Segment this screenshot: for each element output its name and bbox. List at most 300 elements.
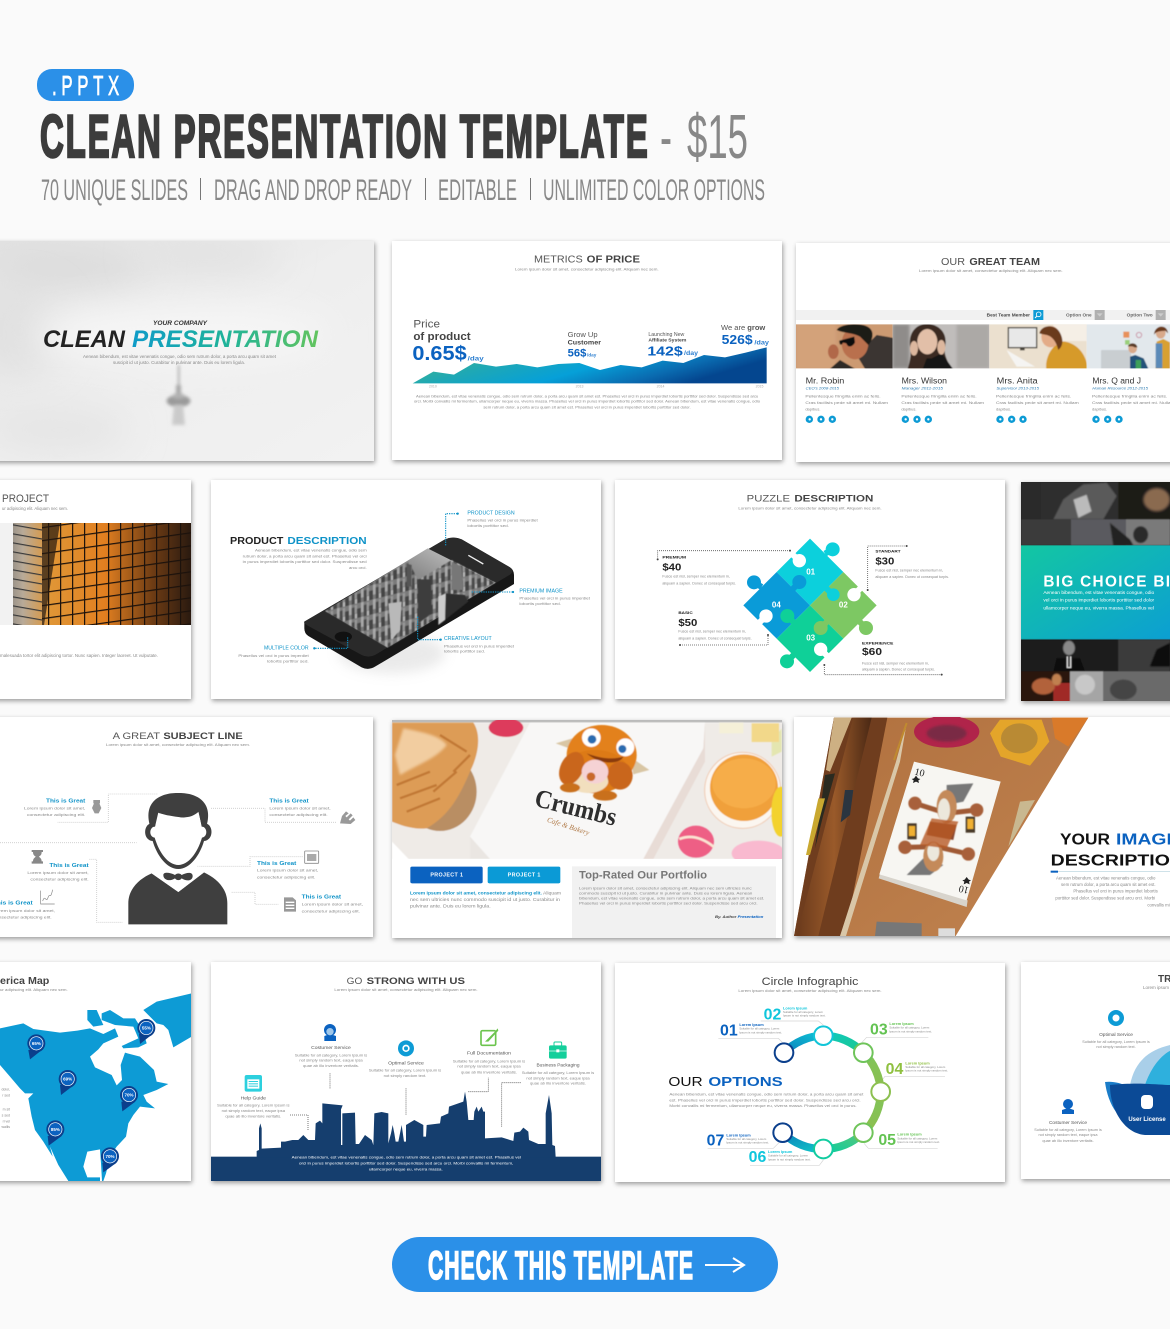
slide title: erica Map bbox=[0, 976, 49, 987]
slide: your image description bbox=[794, 716, 1170, 936]
option 06 bbox=[749, 1149, 811, 1166]
leader lines bbox=[708, 1021, 945, 1165]
axis years: 2014 bbox=[657, 385, 665, 389]
callout: lower left bbox=[0, 901, 55, 919]
team member: Mr. Robin bbox=[805, 376, 889, 423]
metric: 526$ bbox=[721, 325, 770, 347]
option 02 bbox=[764, 1006, 826, 1023]
callout: top right: This is Great bbox=[269, 798, 309, 804]
metric: 0.65$: of product bbox=[413, 331, 471, 343]
item: optimal service: Optimal Service bbox=[388, 1061, 424, 1066]
option 06: 06 bbox=[749, 1149, 766, 1166]
item: optimal service: Optimal Service bbox=[1099, 1032, 1133, 1038]
paragraph: wallis bbox=[1, 1125, 10, 1129]
option 02: Suitable for all category, Lorem bbox=[783, 1010, 824, 1014]
photo collage: bottom bbox=[1018, 640, 1170, 704]
team member: Mrs. Wilson bbox=[901, 376, 985, 423]
subtitle features: EDITABLE bbox=[438, 174, 517, 207]
slide title: METRICS bbox=[534, 255, 583, 266]
text: your company: YOUR COMPANY bbox=[153, 321, 208, 327]
item: business packaging: Business Packaging bbox=[536, 1062, 580, 1067]
button: project 1 blue: PROJECT 1 bbox=[430, 872, 463, 878]
team member: Mr. Robin: CEO's 2008-2015 bbox=[806, 386, 840, 390]
panel: top-rated portfolio: bibendum, est vitae venenatis congue, odio sem rutrum dolor, a porta arcu quam sit amet est. bbox=[579, 897, 764, 901]
callout: premium image: Phasellus vel orci in purus imperdiet bbox=[519, 596, 591, 601]
callout: middle right bbox=[257, 861, 318, 879]
option 06: Suitable for all category, Lorem bbox=[768, 1154, 809, 1158]
team member: Mrs. Q and J: Pellentesque fringilla enim ac felis. bbox=[1092, 394, 1167, 399]
slide title: OUR bbox=[941, 257, 965, 268]
metric: 0.65$: Price bbox=[413, 319, 440, 331]
photo: macarons and plate bbox=[678, 723, 790, 866]
icon: hourglass bbox=[32, 850, 43, 864]
slide title: Circle Infographic bbox=[762, 976, 859, 988]
option 01: 01 bbox=[720, 1023, 738, 1040]
item: help guide: not simply random text, eaque ipsa bbox=[222, 1109, 286, 1113]
panel: top-rated portfolio: commodo suscipit id ut justo. Curabitur in pulvinar ante. Duis eu lorem ligula. Aenean bbox=[579, 892, 752, 896]
paragraph: ullamcorper neque eu, viverra massa. Phasellus vel bbox=[1043, 605, 1154, 611]
slide title: PUZZLE bbox=[747, 494, 790, 504]
item: business packaging: not simply random text, eaque ipsa bbox=[526, 1076, 591, 1080]
option 07: Lorem Ipsum bbox=[726, 1133, 751, 1137]
slide: product description bbox=[211, 480, 601, 699]
subtitle features: DRAG AND DROP READY bbox=[214, 174, 412, 207]
slide: puzzle description bbox=[615, 480, 1005, 699]
heading: BIG CHOICE BI bbox=[1043, 573, 1170, 590]
callout: top left: consectetur adipiscing elit. bbox=[27, 812, 85, 817]
puzzle graphic: 03 bbox=[806, 634, 816, 643]
callout: creative layout: lobortis porttitor sed. bbox=[444, 649, 485, 654]
paragraph: orci in purus imperdiet lobortis porttitor sed dolor. Suspendisse sed arcu orci. Morbi convallis mi fermentum, bbox=[299, 1161, 513, 1166]
slide title: SUBJECT LINE bbox=[163, 731, 243, 741]
team member: Mr. Robin: Cras facilisis pede sit amet mi. Nullam bbox=[805, 400, 889, 405]
slide title: OF PRICE bbox=[587, 255, 640, 266]
heading: clean presentation bbox=[43, 326, 319, 353]
option 04: Ipsum is not simply random text. bbox=[905, 1069, 948, 1073]
paragraph: Aenean bibendum, est vitae venenatis congue, odio sem rutrum dolor, a porta arcu quam sit amet bbox=[669, 1091, 864, 1096]
option 03: Ipsum is not simply random text. bbox=[889, 1029, 932, 1033]
map pins bbox=[27, 1019, 155, 1172]
map pins: 70% bbox=[124, 1093, 134, 1098]
callout: middle right: Lorem ipsum dolor sit amet, bbox=[257, 868, 318, 873]
price: basic: $50 bbox=[678, 618, 698, 629]
option 04: 04 bbox=[886, 1061, 904, 1078]
team member: Mrs. Wilson: dapibus. bbox=[901, 406, 916, 411]
heading: clean presentation: CLEAN bbox=[43, 326, 126, 353]
option 03: Suitable for all category, Lorem bbox=[889, 1026, 930, 1030]
item: full documentation: Suitable for all category, Lorem Ipsum is bbox=[453, 1059, 525, 1063]
item: costumer service: Costumer Service bbox=[1049, 1120, 1087, 1126]
subtitle features: UNLIMITED COLOR OPTIONS bbox=[543, 174, 765, 207]
icon: pencil bbox=[340, 811, 355, 824]
option 06: Ipsum is not simply random text. bbox=[768, 1157, 811, 1161]
callout: middle left: This is Great bbox=[49, 863, 89, 869]
slide title: PROJECT bbox=[2, 493, 49, 505]
option 07: Suitable for all category, Lorem bbox=[726, 1137, 767, 1141]
slide title bbox=[347, 976, 465, 986]
item: costumer service bbox=[295, 1024, 367, 1068]
option 01: Lorem Ipsum bbox=[739, 1023, 764, 1027]
callout: top left: This is Great bbox=[46, 798, 85, 804]
subtitle: Lorem ipsum dolor sit amet, consectetur adipiscing elit. Aliquam nec sem. bbox=[738, 988, 882, 993]
lotus graphic bbox=[1105, 1045, 1170, 1135]
callout: top left: Lorem ipsum dolor sit amet, bbox=[24, 806, 85, 811]
callout: product design: Phasellus vel orci in purus imperdiet bbox=[467, 518, 539, 523]
callout: top right: Lorem ipsum dolor sit amet, bbox=[269, 805, 331, 810]
heading: clean presentation: PRESENTATION bbox=[132, 326, 319, 353]
badge: .PPTX bbox=[37, 69, 134, 101]
connector lines bbox=[290, 1073, 521, 1130]
slide: circle infographic bbox=[615, 963, 1005, 1182]
card illustration: dwarf king bbox=[898, 783, 983, 875]
badge: .PPTX: .PPTX bbox=[52, 70, 119, 101]
price: experience: Fusce est nisl, semper nec elementum in, bbox=[862, 661, 929, 665]
paragraph: ri vel bbox=[3, 1119, 10, 1123]
heading bbox=[230, 536, 367, 547]
icon: document bbox=[284, 897, 296, 912]
slide: a great subject line bbox=[0, 717, 373, 937]
metric: 56$: /day bbox=[587, 353, 597, 358]
paragraph: Aenean bibendum, est vitae venenatis congue, odio bbox=[1056, 875, 1156, 880]
team member: Mr. Robin: Pellentesque fringilla enim ac felis. bbox=[805, 394, 881, 399]
filter bar: Best Team Member bbox=[987, 313, 1030, 318]
paragraph: orci. Morbi convallis mi fermentum, ullamcorper neque eu, viverra massa. Phasellus vel orci in purus imperdiet lobortis porttitor sed dolor. Aenean bibendum, est vitae venenatis congue, odio bbox=[414, 400, 760, 404]
paragraph: porttitor sed dolor. Suspendisse sed arcu orci. Morbi bbox=[1055, 896, 1155, 901]
puzzle graphic: 02 bbox=[839, 601, 848, 610]
subtitle: ur adipiscing elit. Aliquam nec sem. bbox=[0, 988, 68, 992]
item: optimal service bbox=[1082, 1010, 1150, 1049]
callout: creative layout: CREATIVE LAYOUT bbox=[444, 636, 493, 642]
team member: Mr. Robin: Mr. Robin bbox=[806, 376, 844, 385]
paragraph: sem rutrum dolor, a porta arcu quam sit amet est. bbox=[1061, 882, 1156, 887]
subtitle features bbox=[41, 174, 765, 207]
paragraph: m sit bbox=[3, 1108, 10, 1112]
paragraph bbox=[243, 547, 367, 570]
option 03: 03 bbox=[870, 1022, 888, 1039]
paragraph: r sed bbox=[2, 1094, 10, 1098]
map pins: 85% bbox=[51, 1127, 60, 1132]
header bbox=[37, 69, 765, 207]
callout: top left bbox=[24, 798, 85, 817]
paragraph: Aenean bibendum, est vitae venenatis congue, odio sem bbox=[255, 547, 367, 552]
callout: premium image: PREMIUM IMAGE bbox=[519, 588, 563, 594]
subtitle: Lorem ipsum dolor sit amet, consectetur adipiscing elit. Aliquam nec sem. bbox=[106, 743, 250, 747]
callout: creative layout bbox=[418, 617, 515, 654]
photo: woman thinking bbox=[892, 324, 990, 368]
price: basic: aliquam a sapien. Donec ut consequat turpis. bbox=[678, 636, 752, 640]
option 01 bbox=[720, 1023, 782, 1040]
option 05: 05 bbox=[878, 1132, 896, 1149]
item: costumer service: not simply random text, eaque ipsa bbox=[299, 1059, 364, 1063]
icon: tower bbox=[166, 365, 190, 425]
price: basic: Fusce est nisl, semper nec elementum in, bbox=[678, 630, 746, 634]
item: optimal service: not simply random text. bbox=[1096, 1045, 1136, 1049]
puzzle graphic: 01 bbox=[806, 567, 816, 576]
subtitle: ur adipiscing elit. Aliquam nec sem. bbox=[2, 506, 68, 511]
filter bar: Option Two bbox=[1127, 313, 1153, 318]
team member: Mrs. Q and J: Mrs. Q and J bbox=[1092, 376, 1141, 385]
team member: Mrs. Q and J: dapibus. bbox=[1092, 406, 1107, 411]
option 06: Lorem Ipsum bbox=[768, 1150, 792, 1154]
item: costumer service bbox=[1034, 1099, 1102, 1143]
callout: top right bbox=[269, 798, 331, 817]
heading: PRODUCT bbox=[230, 536, 283, 547]
price: standart: STANDART bbox=[875, 550, 902, 554]
paragraph: est. Phasellus vel orci in purus imperdiet lobortis porttitor sed dolor. Suspendisse sed arcu orci. bbox=[669, 1097, 861, 1102]
paragraph: convallis mi bbox=[1147, 902, 1170, 907]
heading: IMAGE bbox=[1116, 831, 1170, 848]
panel: top-rated portfolio: By. Author Presentation bbox=[715, 915, 764, 919]
option 05: Suitable for all category, Lorem bbox=[897, 1136, 938, 1140]
item: costumer service: quae ab illo inventore veritatis. bbox=[303, 1064, 359, 1068]
item: full documentation: quae ab illo inventore veritatis. bbox=[461, 1070, 517, 1074]
subtitle: Lorem ipsum dolor sit amet, consectetur adipiscing elit. Aliquam nec sem. bbox=[334, 987, 478, 992]
item: optimal service bbox=[369, 1040, 441, 1078]
option 07: Ipsum is not simply random text. bbox=[726, 1141, 769, 1145]
item: business packaging: quae ab illo inventore veritatis. bbox=[530, 1082, 586, 1086]
option 01: Ipsum is not simply random text. bbox=[739, 1030, 782, 1034]
photo: playing card on cork desk bbox=[794, 716, 1088, 936]
item: full documentation bbox=[453, 1028, 525, 1074]
paragraph: Aenean bibendum, est vitae venenatis congue, odio bbox=[1043, 590, 1155, 596]
price: - bbox=[660, 103, 672, 172]
option 04: Lorem Ipsum bbox=[905, 1061, 930, 1065]
slide title: GO bbox=[347, 976, 362, 986]
callout: product design bbox=[446, 510, 539, 545]
item: costumer service: quae ab illo inventore veritatis. bbox=[1042, 1139, 1094, 1143]
paragraph: nec sem ultricies nunc commodo suscipit id ut justo. Curabitur in bbox=[410, 897, 561, 902]
price: $15 bbox=[687, 103, 748, 172]
slide: project bbox=[0, 480, 191, 699]
metric: 526$: We are grow bbox=[721, 325, 766, 332]
price: standart: Fusce est nisl, semper nec elementum in, bbox=[875, 569, 943, 573]
price: premium: aliquam a sapien. Donec ut consequat turpis. bbox=[662, 581, 736, 585]
paragraph: Aenean bibendum, est vitae venenatis congue, odio sem rutrum dolor, a porta arcu quam sit amet est. Phasellus vel orci in purus imperdiet lobortis porttitor sed dolor. Suspendisse sed arcu bbox=[416, 394, 758, 398]
callout: lower right: consectetur adipiscing elit. bbox=[302, 908, 360, 913]
slide title: DESCRIPTION bbox=[794, 494, 874, 504]
callout: multiple color: lobortis porttitor sed. bbox=[267, 658, 309, 663]
photo: office team bbox=[1086, 324, 1170, 368]
callout: lower right: This is Great bbox=[302, 895, 341, 901]
metric: 142$ bbox=[647, 332, 699, 358]
option 03 bbox=[870, 1022, 932, 1039]
item: help guide bbox=[217, 1075, 290, 1118]
logo text: Crumbs: Crumbs bbox=[532, 783, 620, 832]
callout: multiple color: Phasellus vel orci in purus imperdiet bbox=[238, 653, 310, 658]
team member: Mrs. Wilson: Manager 2011-2015 bbox=[902, 386, 944, 390]
item: optimal service: not simply random text. bbox=[384, 1074, 426, 1078]
map pins: 69% bbox=[63, 1077, 72, 1082]
subtitle: Lorem ipsum dolor sit amet, consectetur adipiscing elit. Aliquam nec sem. bbox=[919, 268, 1063, 273]
connector lines bbox=[657, 545, 943, 676]
item: business packaging bbox=[522, 1042, 594, 1086]
photo: orange building bbox=[0, 523, 191, 625]
button: project 1 cyan: PROJECT 1 bbox=[508, 872, 540, 878]
team member: Mrs. Anita: Mrs. Anita bbox=[997, 376, 1038, 385]
paragraph: Morbi convallis mi fermentum, ullamcorper neque eu, viverra massa. Phasellus vel orci in purus. bbox=[669, 1103, 857, 1108]
photo: bakery box bbox=[389, 718, 785, 859]
paragraph: ullamcorper neque eu, viverra massa. bbox=[369, 1167, 443, 1172]
price: basic bbox=[678, 611, 752, 640]
filter bar: Option One bbox=[1066, 313, 1092, 318]
metric: 142$: 142$ bbox=[647, 343, 683, 358]
callout: middle left: Lorem ipsum dolor sit amet, bbox=[27, 870, 89, 875]
callout: multiple color bbox=[238, 637, 348, 663]
axis years: 2015 bbox=[756, 385, 764, 389]
item: costumer service: Costumer Service bbox=[311, 1045, 351, 1050]
slide: metrics of price bbox=[392, 241, 782, 460]
text: user license bbox=[1128, 1095, 1166, 1123]
metric: 142$: /day bbox=[684, 351, 699, 357]
callout: product design: PRODUCT DESIGN bbox=[467, 510, 515, 516]
callout: lower right bbox=[302, 895, 363, 913]
item: optimal service: Suitable for all category, Lorem Ipsum is bbox=[369, 1069, 441, 1073]
option 04 bbox=[886, 1061, 948, 1078]
photo: woman at laptop bbox=[989, 324, 1087, 368]
icon: calendar bbox=[305, 851, 319, 863]
puzzle graphic bbox=[743, 539, 877, 672]
card deck: 10 bbox=[958, 882, 970, 895]
price: standart bbox=[875, 550, 949, 579]
button: check this template bbox=[392, 1237, 778, 1292]
card deck bbox=[879, 762, 1001, 907]
paragraph: arcu orci. bbox=[349, 565, 367, 570]
metric: 526$: /day bbox=[754, 340, 770, 346]
option 05: Ipsum is not simply random text. bbox=[897, 1140, 940, 1144]
item: help guide: Help Guide bbox=[241, 1095, 266, 1100]
metric: 142$: Launching New bbox=[648, 332, 685, 338]
photo footer white bbox=[392, 859, 782, 938]
paragraph bbox=[1, 1088, 10, 1129]
paragraph bbox=[414, 394, 760, 409]
option 05: Lorem Ipsum bbox=[897, 1133, 922, 1137]
team member: Mrs. Anita: dapibus. bbox=[996, 406, 1011, 411]
option 05 bbox=[878, 1132, 940, 1149]
price: experience: aliquam a sapien. Donec ut consequat turpis. bbox=[862, 667, 935, 671]
paragraph: rutrum dolor, a porta arcu quam sit amet est. Phasellus vel orci bbox=[243, 553, 367, 558]
slide: user license bbox=[1021, 962, 1170, 1179]
item: full documentation: not simply random text, eaque ipsa bbox=[457, 1065, 522, 1069]
price: premium: PREMIUM bbox=[662, 556, 686, 560]
map pins: 70% bbox=[105, 1154, 115, 1159]
option 01: Suitable for all category, Lorem bbox=[739, 1027, 780, 1031]
team member: Mrs. Wilson: Cras facilisis pede sit amet mi. Nullam bbox=[901, 400, 985, 405]
logo text: Crumbs: Cafe & Bakery bbox=[546, 815, 591, 837]
teal band bbox=[1021, 545, 1170, 640]
heading: our options: OUR bbox=[668, 1074, 703, 1089]
icon: pen nib bbox=[92, 800, 101, 813]
item: costumer service: not simply random text, eaque ipsa bbox=[1039, 1133, 1098, 1137]
map pins: 55% bbox=[142, 1026, 151, 1031]
paragraph: dolor, bbox=[1, 1088, 10, 1092]
item: help guide: Suitable for all category, Lorem Ipsum is bbox=[217, 1104, 290, 1108]
item: costumer service: Suitable for all category, Lorem Ipsum is bbox=[295, 1053, 367, 1057]
paragraph bbox=[410, 891, 561, 908]
heading: DESCRIPTION bbox=[287, 536, 367, 547]
team member: Mrs. Wilson: Mrs. Wilson bbox=[902, 376, 947, 385]
subtitle: Lorem ipsum dolor sit amet, consectetur adipiscing elit. Aliquam nec sem. bbox=[515, 266, 659, 271]
paragraph: Aenean bibendum, est vitae venenatis congue, odio sem rutrum dolor, a porta arcu quam sit amet est. Phasellus vel bbox=[292, 1155, 521, 1160]
option 02: 02 bbox=[764, 1006, 781, 1023]
title: CLEAN PRESENTATION TEMPLATE bbox=[40, 104, 648, 171]
option 02: Lorem Ipsum bbox=[783, 1006, 807, 1010]
team member: Mrs. Anita: Cras facilisis pede sit amet mi. Nullam bbox=[996, 400, 1079, 405]
callout: middle right: This is Great bbox=[257, 861, 296, 867]
subtitle features: 70 UNIQUE SLIDES bbox=[41, 174, 188, 207]
axis years: 2013 bbox=[576, 385, 584, 389]
price bbox=[660, 103, 748, 172]
callout: premium image: lobortis porttitor sed. bbox=[519, 601, 561, 606]
illustration: monster mascot bbox=[554, 725, 649, 801]
item: help guide: quae ab illo inventore veritatis. bbox=[225, 1114, 281, 1118]
slide title bbox=[113, 731, 243, 741]
paragraph: s sed bbox=[2, 1114, 10, 1118]
option 03: Lorem Ipsum bbox=[889, 1022, 914, 1026]
callout: multiple color: MULTIPLE COLOR bbox=[264, 646, 309, 652]
slide: go strong with us bbox=[211, 962, 601, 1181]
price: premium: Fusce est nisl, semper nec elementum in, bbox=[662, 575, 730, 579]
callout: top right: consectetur adipiscing elit. bbox=[269, 812, 328, 817]
photo: man with sunglasses bbox=[796, 324, 893, 368]
paragraph bbox=[1055, 875, 1170, 907]
price: premium: $40 bbox=[662, 563, 682, 574]
panel: top-rated portfolio: Top-Rated Our Portfolio bbox=[579, 869, 707, 881]
slide: big choice bbox=[1018, 479, 1170, 704]
puzzle graphic: 04 bbox=[772, 601, 781, 610]
team member: Mrs. Anita: Pellentesque fringilla enim ac felis. bbox=[996, 394, 1071, 399]
slide title bbox=[747, 494, 874, 504]
callout: creative layout: Phasellus vel orci in purus imperdiet bbox=[444, 643, 515, 648]
ring chart bbox=[773, 1026, 890, 1158]
team member: Mrs. Q and J: Cras facilisis pede sit amet mi. Nullam bbox=[1092, 400, 1170, 405]
item: costumer service: Suitable for all category, Lorem Ipsum is bbox=[1034, 1128, 1102, 1132]
option 04: Suitable for all category, Lorem bbox=[905, 1065, 946, 1069]
heading: our options: OPTIONS bbox=[708, 1074, 783, 1089]
heading: DESCRIPTION bbox=[1051, 853, 1170, 870]
metric: 526$: 526$ bbox=[722, 332, 753, 347]
slide title bbox=[941, 257, 1040, 268]
subtitle: Lorem ipsum dolor sit amet, consectetur adipiscing elit. Aliquam nec sem. bbox=[738, 505, 882, 510]
area chart bbox=[413, 347, 767, 383]
connector lines bbox=[0, 794, 337, 922]
paragraph: vel orci in purus imperdiet lobortis porttitor sed dolor bbox=[1043, 598, 1155, 604]
callout: lower right: Lorem ipsum dolor sit amet, bbox=[302, 902, 363, 907]
team member: Mrs. Wilson: Pellentesque fringilla enim ac felis. bbox=[901, 394, 977, 399]
icon: arrow bbox=[705, 1258, 744, 1272]
top strip bbox=[392, 720, 782, 723]
price: experience: $60 bbox=[862, 647, 883, 658]
metric: 0.65$: 0.65$ bbox=[412, 343, 467, 365]
item: full documentation: Full Documentation bbox=[467, 1051, 511, 1056]
heading: our options bbox=[668, 1074, 783, 1089]
slide: clean presentation cover bbox=[0, 241, 374, 461]
price: standart: $30 bbox=[875, 557, 895, 568]
price: basic: BASIC bbox=[678, 611, 693, 615]
heading bbox=[1051, 831, 1170, 870]
callout: product design: lobortis porttitor sed. bbox=[467, 523, 509, 528]
slide title: GREAT TEAM bbox=[969, 257, 1040, 268]
button: check this template: CHECK THIS TEMPLATE bbox=[428, 1243, 693, 1288]
panel: top-rated portfolio: Phasellus vel orci in purus imperdiet lobortis porttitor sed dolor. Suspendisse sed arcu orci. bbox=[579, 902, 758, 906]
price: standart: aliquam a sapien. Donec ut consequat turpis. bbox=[875, 575, 949, 579]
paragraph: pulvinar ante. Duis eu lorem ligula. bbox=[410, 903, 491, 908]
axis years bbox=[429, 385, 764, 389]
paragraph: in purus imperdiet lobortis porttitor sed dolor. Suspendisse sed bbox=[243, 559, 367, 564]
metric: 56$: 56$ bbox=[568, 348, 586, 360]
slide: our great team bbox=[793, 243, 1170, 462]
callout: premium image bbox=[472, 588, 591, 606]
slide: crumbs portfolio bbox=[389, 718, 790, 938]
